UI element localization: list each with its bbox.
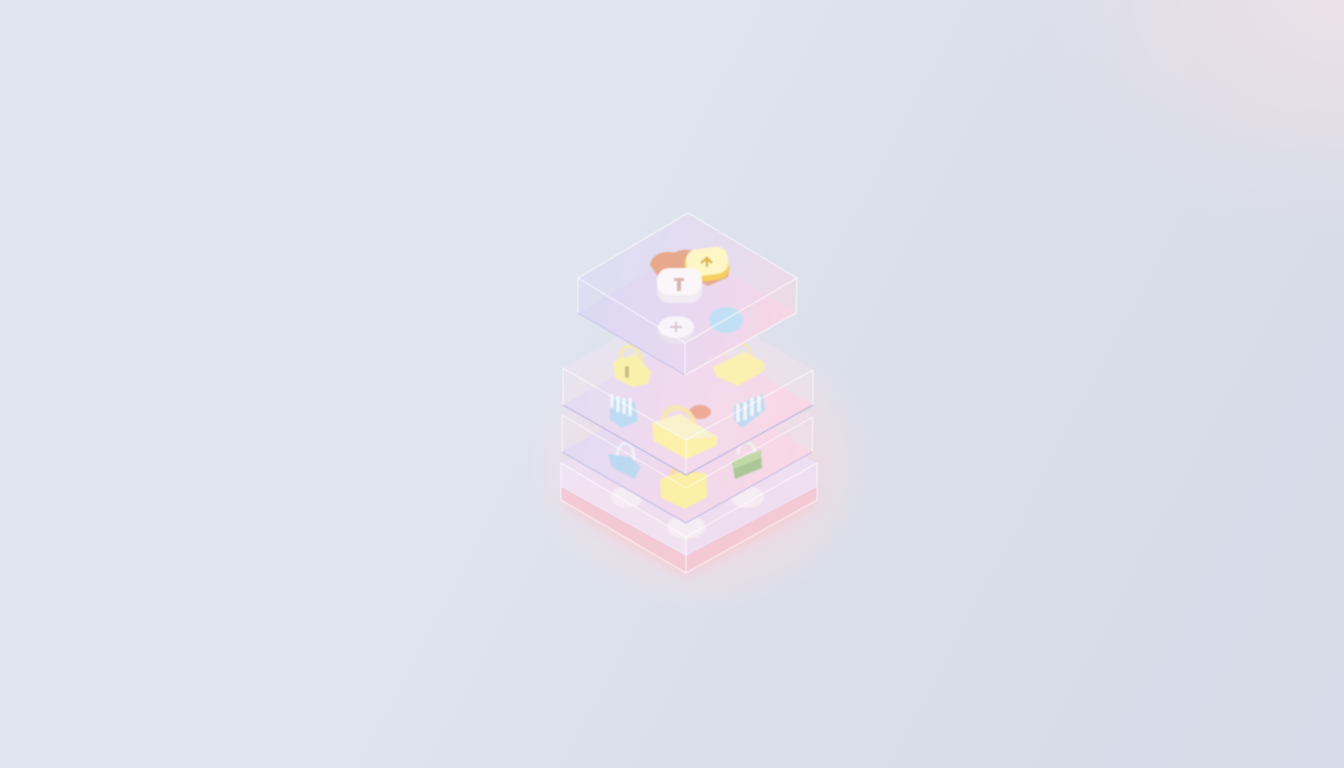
- layer 2: [563, 298, 813, 475]
- icon: yellow padlock: [660, 466, 707, 509]
- layer 1: top tray: [578, 213, 797, 375]
- icon: blue disc: [709, 307, 743, 333]
- icon: yellow padlock left: [613, 346, 651, 387]
- icon: white disc: [658, 316, 694, 344]
- icon: yellow bag right: [713, 343, 765, 386]
- icon: yellow tile: [683, 245, 731, 284]
- icon: white tile: [657, 268, 702, 303]
- icon: big yellow padlock: [652, 408, 718, 459]
- icon: white disc left: [611, 486, 643, 508]
- icon: blue gift left: [610, 394, 638, 428]
- icon: orange tile: [650, 250, 729, 286]
- icon: white disc right: [730, 486, 764, 508]
- icon: blue gift right: [734, 394, 765, 428]
- layer 3: [562, 345, 813, 523]
- glow under the stack: [522, 315, 882, 615]
- icon: green bag: [732, 442, 762, 479]
- icon: blue bag: [608, 443, 641, 479]
- icon: small orange badge: [689, 405, 711, 419]
- icon: white disc front: [667, 515, 705, 539]
- layer 4: base: [561, 390, 817, 573]
